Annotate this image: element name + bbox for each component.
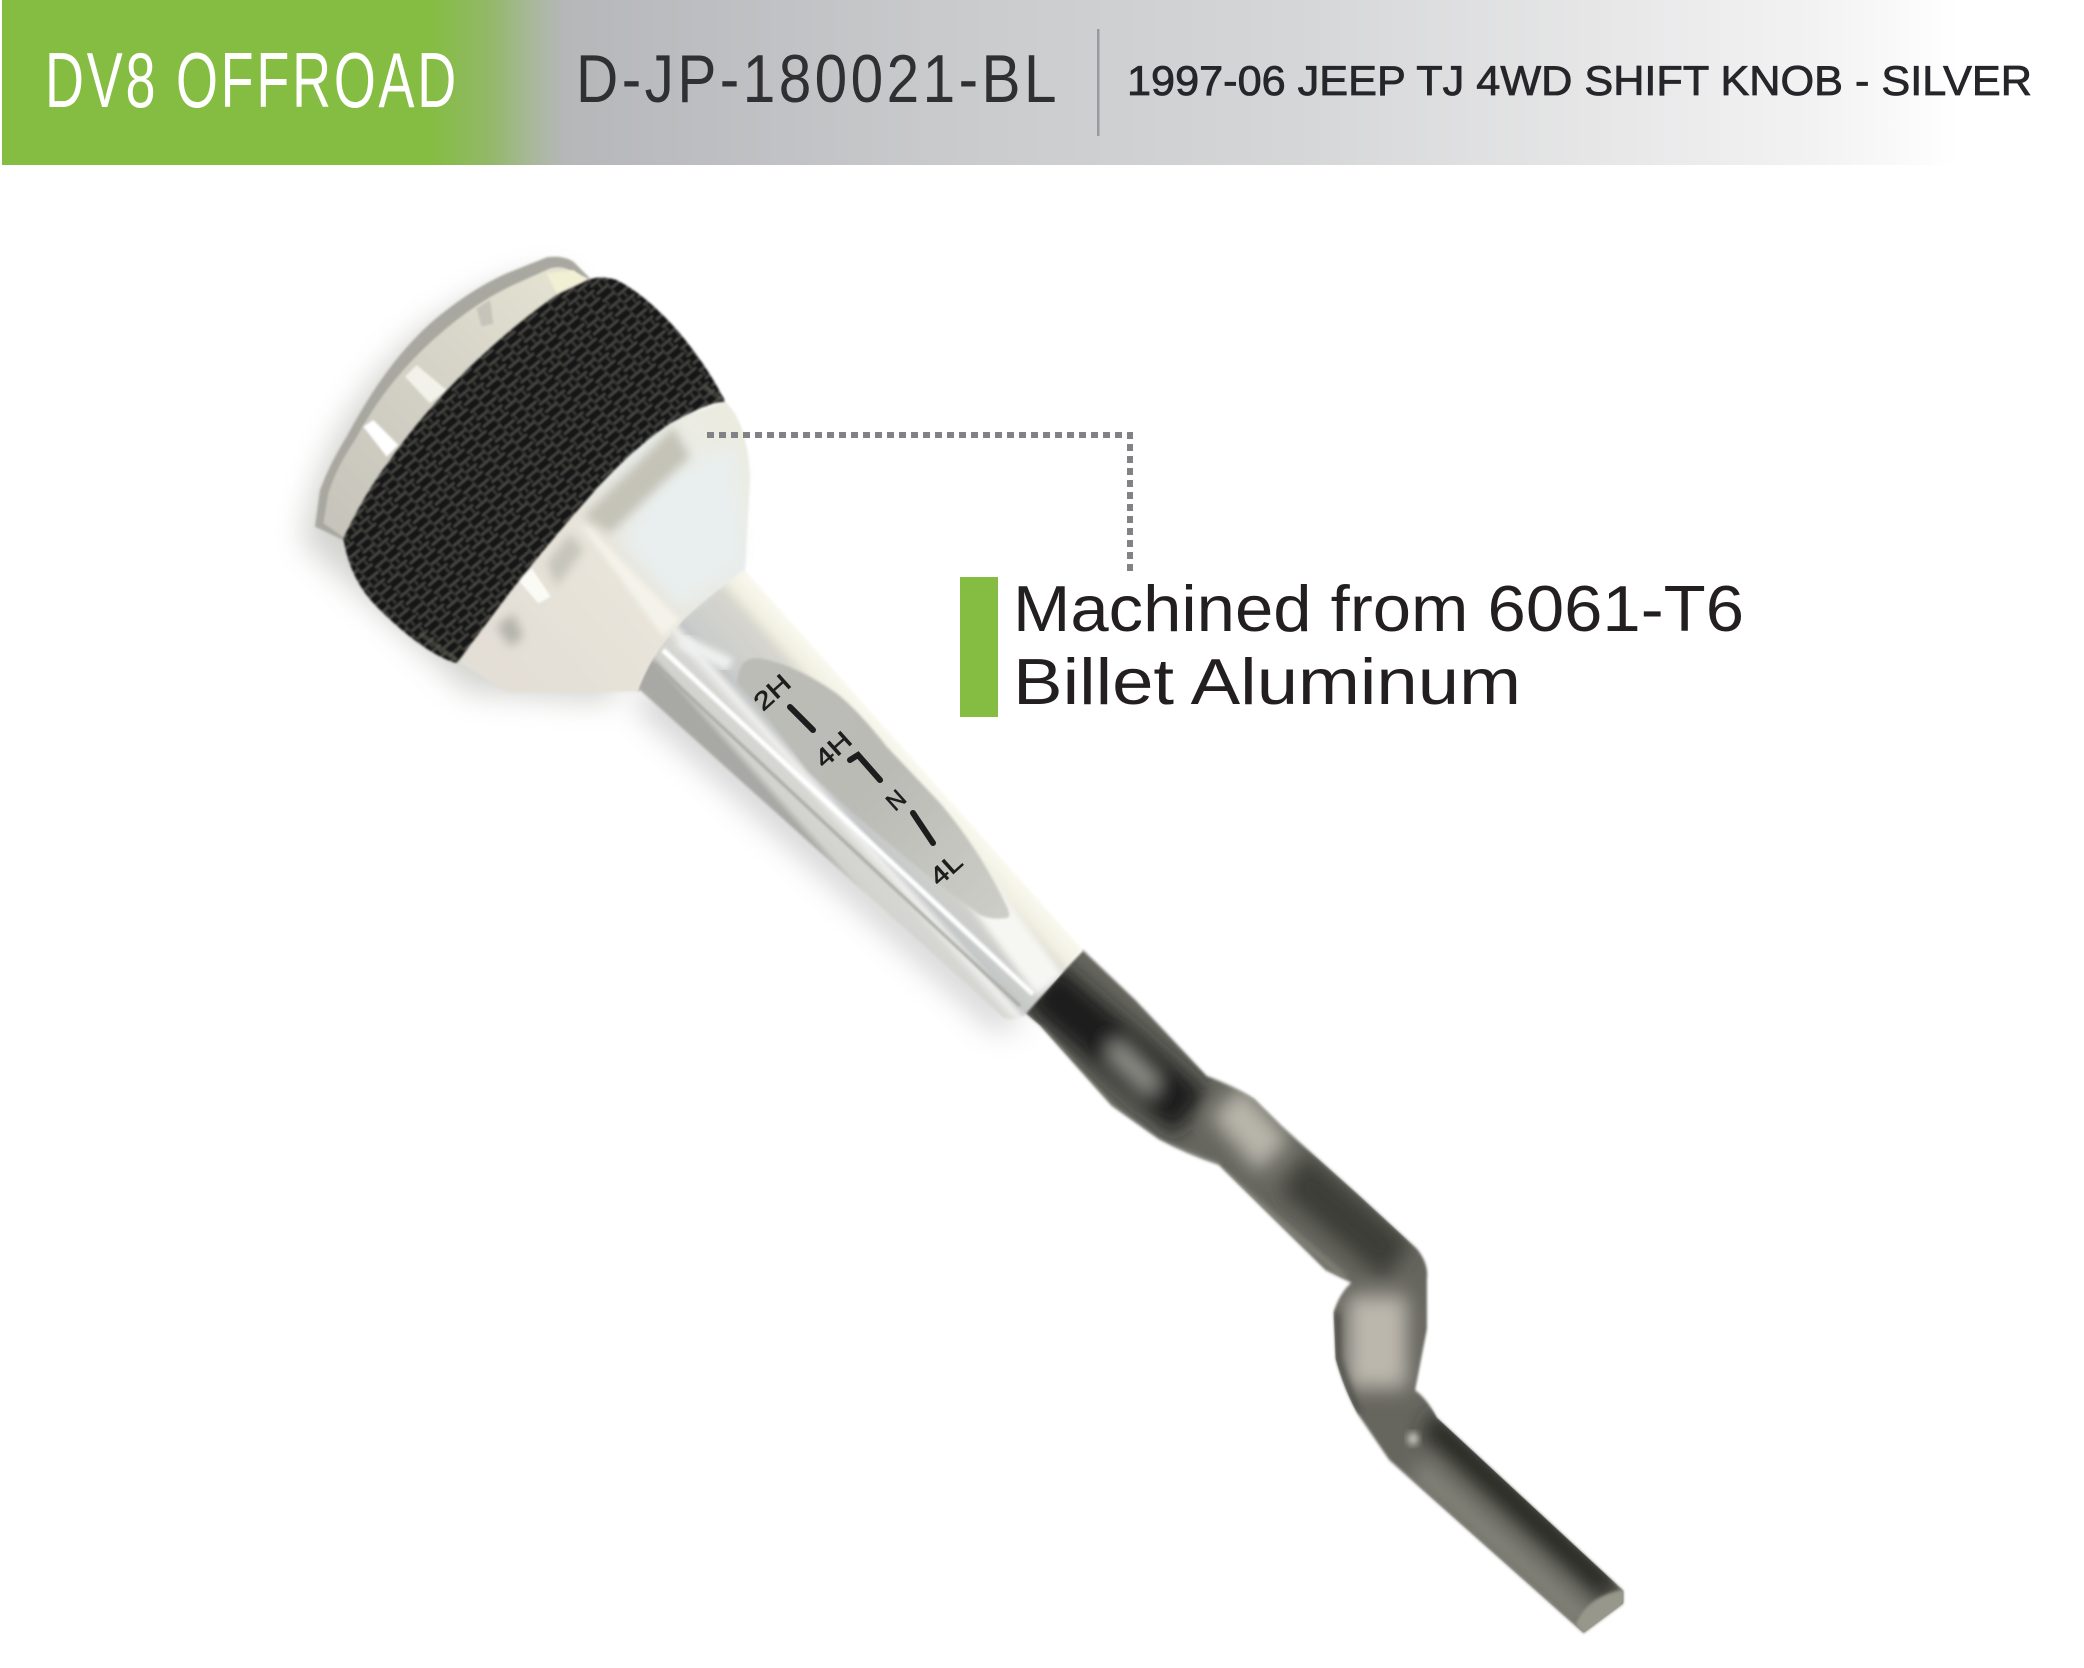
callout text [1013, 572, 1744, 718]
header divider [1097, 29, 1100, 136]
lever rod [1020, 950, 1627, 1635]
aluminum handle [637, 570, 1083, 1019]
cone bright facet [620, 447, 742, 610]
header brand name: DV8 OFFROAD [45, 36, 459, 124]
plate markings: N [881, 785, 912, 816]
gear selector plate [737, 658, 1009, 919]
header band [2, 0, 2084, 165]
handle machined lines [663, 650, 1033, 994]
plate markings: 2H [748, 669, 797, 716]
soft halo shadow [303, 274, 1024, 1032]
callout leader dotted line [707, 435, 1130, 571]
knob end cap [315, 257, 590, 542]
cap highlights [363, 270, 587, 457]
cone dark and light stripes [497, 427, 690, 647]
callout green marker [960, 577, 998, 717]
plate markings: 4H [809, 726, 858, 773]
knob cone [460, 402, 750, 692]
header part number: D-JP-180021-BL [576, 41, 1060, 117]
product photo: shift knob and lever [303, 257, 1627, 1635]
callout text: Machined from 6061-T6 [1013, 572, 1744, 645]
grip edge tone [420, 387, 723, 660]
callout text: Billet Aluminum [1013, 645, 1521, 718]
header product title: 1997-06 JEEP TJ 4WD SHIFT KNOB - SILVER [1127, 57, 2032, 104]
knob rubber grip [343, 277, 725, 663]
plate markings: 4L [924, 848, 968, 891]
callout: material [960, 572, 1744, 718]
plate markings [748, 669, 968, 891]
